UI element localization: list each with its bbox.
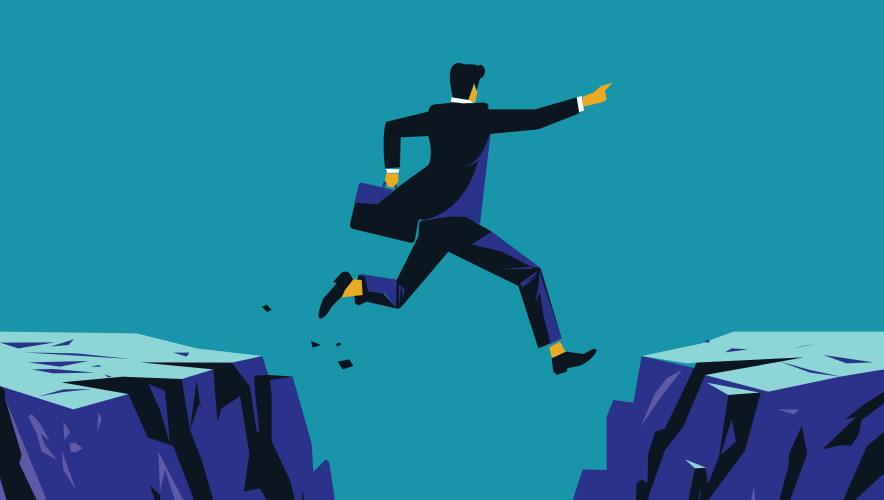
debris bbox=[311, 341, 321, 348]
cliff top surface bbox=[0, 332, 262, 409]
hair and head bbox=[450, 63, 485, 100]
cliff top surface bbox=[642, 332, 884, 377]
man legs and debris bbox=[262, 217, 597, 375]
shirt collar bbox=[451, 97, 474, 103]
left knee fold bbox=[401, 285, 405, 299]
right shirt cuff bbox=[577, 96, 584, 112]
debris bbox=[262, 305, 272, 312]
calf highlight bbox=[539, 268, 562, 344]
purple rock highlights bbox=[641, 369, 799, 500]
man upper body bbox=[350, 63, 613, 243]
cliff rock face bbox=[0, 356, 335, 500]
thigh highlight bbox=[472, 232, 540, 268]
navy slit in shadow bbox=[148, 384, 170, 443]
left shirt cuff bbox=[386, 169, 399, 173]
face bbox=[468, 83, 477, 103]
right cliff bbox=[573, 332, 884, 500]
cliff rock face bbox=[573, 356, 884, 500]
cliff shadows and cracks bbox=[636, 357, 884, 500]
briefcase body bbox=[350, 203, 425, 243]
debris bbox=[338, 359, 353, 369]
debris bbox=[336, 342, 342, 347]
purple rock highlights bbox=[0, 398, 183, 500]
small ledge bbox=[707, 383, 760, 395]
right shoe bbox=[552, 349, 597, 375]
briefcase flap bbox=[354, 183, 393, 207]
right hand bbox=[583, 83, 613, 107]
left trouser cuff navy bbox=[358, 274, 398, 307]
left knee folds bbox=[399, 285, 401, 307]
jacket bbox=[375, 97, 579, 220]
navy slit in shadow bbox=[721, 419, 736, 455]
left cliff bbox=[0, 332, 335, 500]
knee creases bbox=[520, 271, 538, 287]
trousers bbox=[396, 217, 562, 348]
front ledge surface bbox=[705, 362, 840, 392]
jacket lining bbox=[419, 133, 491, 224]
surface cracks bbox=[704, 339, 873, 377]
surface cracks bbox=[0, 339, 189, 397]
jacket fold bbox=[465, 136, 490, 167]
calf crease bbox=[535, 285, 540, 303]
right sock bbox=[549, 342, 566, 357]
small outcrop bbox=[685, 459, 706, 468]
left hand bbox=[385, 173, 398, 187]
briefcase handle bbox=[383, 183, 396, 188]
left sock bbox=[342, 279, 363, 297]
thigh crease bbox=[497, 267, 533, 269]
left trouser shadow bbox=[354, 275, 397, 309]
left shoe bbox=[319, 272, 353, 318]
cliff shadows and cracks bbox=[0, 362, 304, 500]
